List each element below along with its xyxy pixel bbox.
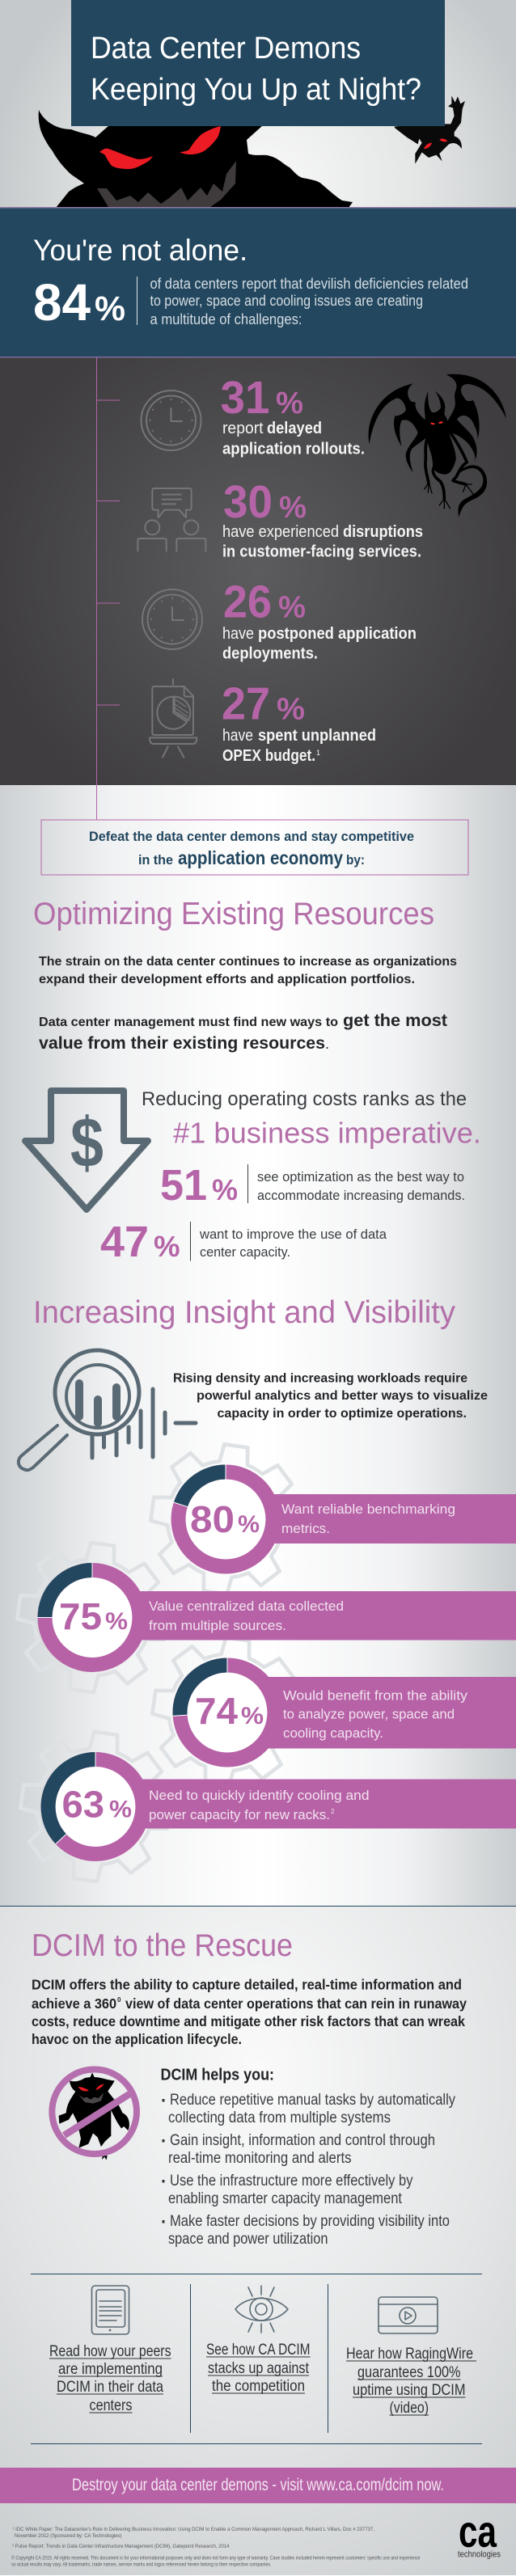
heading: increasing insight and visibility: Increasing Insight and Visibility <box>33 1295 455 1330</box>
icon: video player <box>379 2297 438 2333</box>
panel: you're not alone: to power, space and cooling issues are creating <box>150 293 423 309</box>
footnotes: so actual results may vary. All trademarks, trade names, service marks and logos referenced herein belong to their respective companies. <box>11 2561 272 2568</box>
icon: magnifying glass with bars <box>19 1350 196 1470</box>
stat: 30 percent: % <box>279 491 307 525</box>
stat: 63 percent donut: 2 <box>331 1808 335 1815</box>
resource link: hear how RagingWire: (video) <box>390 2400 429 2417</box>
resource link: read how your peers <box>49 2286 171 2414</box>
stat: 80 percent donut: metrics. <box>281 1521 330 1536</box>
stat: 31 percent: application rollouts. <box>222 440 365 458</box>
text block: DCIM offers: costs, reduce downtime and mitigate other risk factors that can wreak <box>32 2013 465 2029</box>
icon: eye <box>235 2286 288 2333</box>
heading: optimizing existing resources: Optimizing Existing Resources <box>33 897 434 931</box>
panel: you're not alone: % <box>95 289 125 328</box>
title banner <box>71 0 445 126</box>
stat: 30 percent: 30 <box>223 476 273 528</box>
footnotes: ¹ IDC White Paper: The Datacenter's Role in Delivering Business Innovation: Using DCIM to Enable a Common Management Approach, Richard L Villars, Doc # 237737, <box>13 2527 374 2532</box>
resource link: read how your peers: centers <box>89 2397 133 2414</box>
icon: winged demon <box>369 374 506 517</box>
bullet: gain insight <box>162 2132 435 2167</box>
stat: 26 percent: deployments. <box>222 645 318 663</box>
bullet: make faster decisions: Make faster decisions by providing visibility into <box>170 2213 450 2230</box>
stat: 51 percent: see optimization as the best way to <box>257 1169 464 1185</box>
decorative gears <box>15 1442 304 1883</box>
stat: 47 percent: want to improve the use of data <box>199 1227 387 1242</box>
icon: two people talking <box>137 488 205 551</box>
stat: 74 percent donut: to analyze power, space and <box>283 1706 455 1722</box>
stat: 27 percent: 1 <box>316 749 320 757</box>
CA technologies logo: ca <box>459 2506 497 2557</box>
text block: number one business imperative: Reducing operating costs ranks as the <box>142 1088 467 1110</box>
text block: DCIM offers: 0 <box>117 1996 121 2004</box>
text block: number one business imperative: #1 business imperative. <box>173 1116 481 1150</box>
resource link: read how your peers: DCIM in their data <box>57 2379 163 2396</box>
bullet: reduce repetitive tasks <box>162 2092 455 2126</box>
stat: 26 percent: postponed application <box>258 625 417 643</box>
stat: 63 percent donut: 63 <box>61 1784 104 1826</box>
CA technologies logo: technologies <box>458 2550 501 2560</box>
stat: 80 percent donut: 80 <box>190 1498 235 1540</box>
stat: 27 percent: OPEX budget. <box>222 747 315 765</box>
text block: get the most value <box>39 1011 447 1053</box>
panel: you're not alone: You're not alone. <box>33 234 247 267</box>
icon: clock <box>141 391 201 450</box>
text block: strain on the data center <box>39 955 457 986</box>
footnotes <box>11 2527 421 2568</box>
stat: 26 percent <box>142 576 417 663</box>
stat: 80 percent donut: % <box>238 1511 260 1538</box>
icon: tablet <box>92 2286 129 2334</box>
text block: strain on the data center: expand their development efforts and application portfolios. <box>39 973 415 986</box>
text block: get the most value: get the most <box>343 1011 447 1030</box>
callout: defeat the demons: by: <box>346 853 365 868</box>
panel: you're not alone <box>0 207 516 358</box>
stat: 75 percent donut: 75 <box>59 1595 102 1637</box>
stat: 26 percent: 26 <box>223 576 272 627</box>
stat: 27 percent <box>150 678 376 765</box>
icon: crossed-out demon <box>52 2069 137 2160</box>
stat: 27 percent: % <box>277 692 305 726</box>
icon: small hanging demon <box>394 95 465 164</box>
stat: 75 percent donut: Value centralized data collected <box>149 1598 344 1614</box>
text block: DCIM helps you: DCIM helps you: <box>160 2067 274 2084</box>
bullet: reduce repetitive tasks: Reduce repetitive manual tasks by automatically <box>170 2092 455 2109</box>
bullet: gain insight: real-time monitoring and alerts <box>168 2150 351 2167</box>
stat: 31 percent: 31 <box>220 372 270 424</box>
stat: 74 percent donut: Would benefit from the ability <box>283 1688 468 1703</box>
icon: second clock <box>142 589 202 649</box>
stat: 27 percent: spent unplanned <box>258 727 376 745</box>
stat: 31 percent: report <box>222 420 264 437</box>
resource link: see how CA DCIM <box>206 2286 311 2395</box>
resource link: hear how RagingWire: guarantees 100% <box>357 2364 461 2381</box>
panel: you're not alone: of data centers report that devilish deficiencies related <box>150 276 468 292</box>
stat: 27 percent: have <box>222 727 253 745</box>
stat: 74 percent donut: cooling capacity. <box>283 1725 383 1741</box>
bullet: make faster decisions <box>162 2213 450 2248</box>
bullet: use the infrastructure: enabling smarter capacity management <box>168 2190 403 2207</box>
resource link: hear how RagingWire: uptime using DCIM <box>353 2382 466 2399</box>
callout: defeat the demons <box>41 820 468 875</box>
stat: 27 percent: 27 <box>222 678 270 729</box>
icon: down arrow with dollar <box>25 1091 148 1210</box>
stat: 74 percent donut <box>173 1658 516 1759</box>
bullet: make faster decisions: space and power utilization <box>168 2231 328 2248</box>
bullet: gain insight: Gain insight, information and control through <box>170 2132 435 2149</box>
text block: rising density: Rising density and increasing workloads require <box>173 1371 467 1386</box>
stat: 30 percent <box>137 476 423 561</box>
stat: 63 percent donut: % <box>109 1797 132 1822</box>
title banner: Data Center Demons <box>91 32 361 65</box>
icon: presentation pie chart <box>150 679 197 758</box>
icon: large red-eyed demon <box>39 110 353 208</box>
text block: number one business imperative <box>142 1088 481 1150</box>
text block: DCIM offers: havoc on the application lifecycle. <box>32 2031 242 2047</box>
icon: down arrow with dollar: $ <box>70 1104 104 1182</box>
stat: 63 percent donut: power capacity for new racks. <box>149 1807 330 1822</box>
stat: 31 percent <box>141 372 365 458</box>
footnotes: ² Pulse Report: Trends in Data Center Infrastructure Management (DCIM), Gatepoint Research, 2014 <box>12 2544 230 2549</box>
stat: 47 percent: 47 <box>100 1218 149 1266</box>
text block: get the most value: Data center management must find new ways to <box>39 1016 338 1029</box>
stat: 51 percent: % <box>212 1173 238 1206</box>
text block: DCIM offers: view of data center operations that can rein in runaway <box>125 1995 467 2012</box>
stat: 74 percent donut: 74 <box>195 1690 238 1732</box>
stat: 51 percent: 51 <box>160 1161 207 1210</box>
resource link: see how CA DCIM: stacks up against <box>208 2360 310 2377</box>
stat: 31 percent: delayed <box>267 420 322 437</box>
callout: defeat the demons: Defeat the data center demons and stay competitive <box>89 830 414 844</box>
panel: you're not alone: 84 <box>33 273 91 332</box>
call to action banner <box>0 2468 516 2503</box>
stat: 51 percent: accommodate increasing demands. <box>257 1188 465 1203</box>
resource link: hear how RagingWire <box>346 2297 476 2417</box>
text block: DCIM offers <box>32 1976 467 2047</box>
footnotes: © Copyright CA 2015. All rights reserved. This document is for your informational purposes only and does not form any type of warranty. Case studies included herein represent customers' specific use and experience <box>11 2555 421 2561</box>
bullet: use the infrastructure <box>162 2173 413 2207</box>
callout: defeat the demons: application economy <box>178 847 343 868</box>
stat: 51 percent <box>160 1161 465 1210</box>
stat: 26 percent: % <box>278 590 306 624</box>
text block: strain on the data center: The strain on the data center continues to increase as organizations <box>39 955 457 969</box>
stat: 47 percent <box>100 1218 387 1266</box>
stat: 75 percent donut: from multiple sources. <box>149 1618 286 1633</box>
bullet: use the infrastructure: Use the infrastructure more effectively by <box>170 2173 413 2190</box>
callout: defeat the demons: in the <box>138 853 173 868</box>
text block: DCIM offers: DCIM offers the ability to capture detailed, real-time information and <box>32 1976 462 1992</box>
timeline connector <box>96 357 120 820</box>
stat: 30 percent: in customer-facing services. <box>222 543 421 561</box>
resource link: see how CA DCIM: the competition <box>212 2378 305 2395</box>
stat: 31 percent: % <box>276 386 303 420</box>
panel: you're not alone: a multitude of challenges: <box>150 311 302 327</box>
text block: get the most value: . <box>325 1036 329 1052</box>
stat: 47 percent: % <box>154 1230 180 1263</box>
title banner: Keeping You Up at Night? <box>91 73 421 107</box>
text block: DCIM helps you <box>160 2067 455 2248</box>
stat: 26 percent: have <box>222 625 254 643</box>
resource link: hear how RagingWire: Hear how RagingWire <box>346 2346 473 2363</box>
stat: 75 percent donut <box>37 1563 516 1665</box>
stat: 47 percent: center capacity. <box>200 1244 290 1260</box>
text block: DCIM offers: achieve a 360 <box>32 1995 116 2012</box>
bullet: reduce repetitive tasks: collecting data from multiple systems <box>168 2109 391 2126</box>
text block: rising density: capacity in order to optimize operations. <box>217 1407 467 1421</box>
resource link: read how your peers: are implementing <box>58 2361 163 2378</box>
stat: 80 percent donut: Want reliable benchmarking <box>281 1501 455 1517</box>
text block: rising density: powerful analytics and better ways to visualize <box>197 1389 488 1403</box>
stat: 80 percent donut <box>174 1465 516 1567</box>
stat: 75 percent donut: % <box>105 1608 128 1635</box>
resource link: read how your peers: Read how your peers <box>49 2343 171 2360</box>
panel: dark challenges <box>0 357 516 820</box>
footnotes: November 2012 (Sponsored by: CA Technologies) <box>15 2533 121 2539</box>
stat: 74 percent donut: % <box>241 1703 264 1729</box>
stat: 63 percent donut <box>49 1752 516 1854</box>
text block: rising density <box>173 1371 488 1421</box>
stat: 30 percent: have experienced <box>222 523 339 541</box>
text block: get the most value: value from their existing resources <box>39 1034 325 1053</box>
heading: DCIM to the rescue: DCIM to the Rescue <box>32 1928 293 1963</box>
stat: 63 percent donut: Need to quickly identify cooling and <box>149 1788 369 1803</box>
resource link: see how CA DCIM: See how CA DCIM <box>206 2342 311 2359</box>
stat: 30 percent: disruptions <box>343 523 423 541</box>
